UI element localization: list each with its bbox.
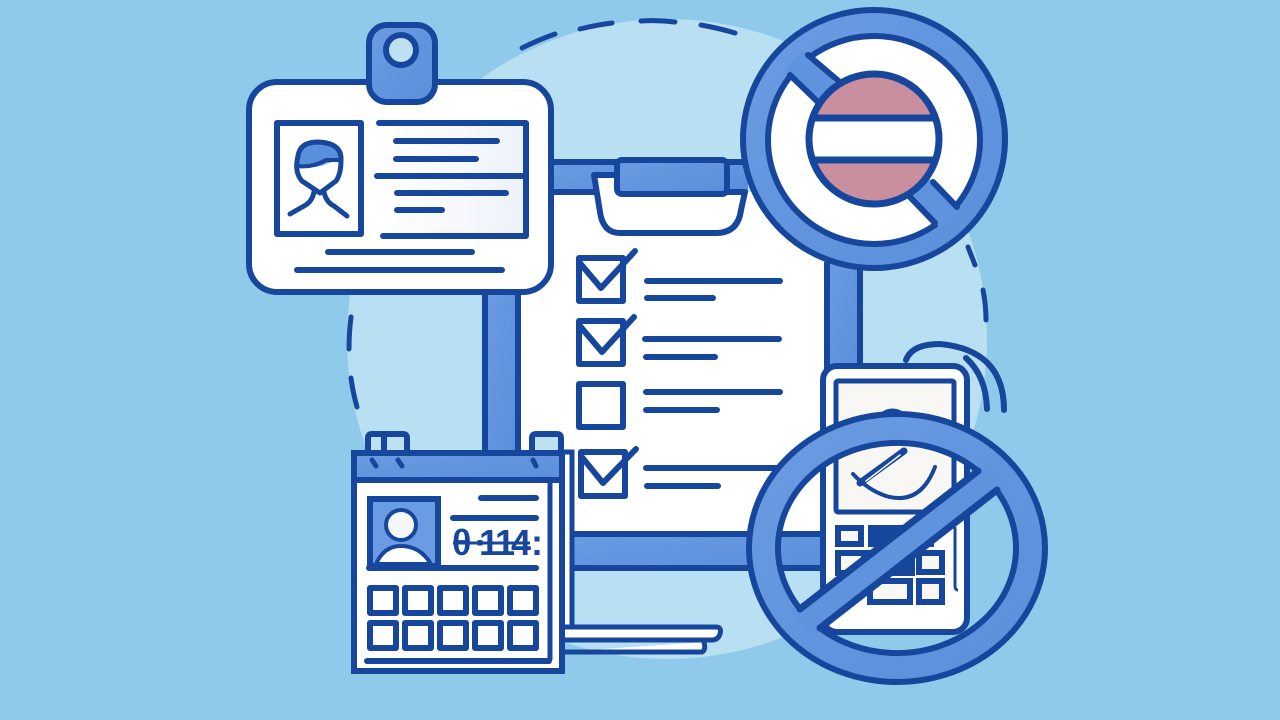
card footer lines [297,252,502,270]
back pages [556,452,720,652]
calendar [354,434,720,671]
screen bump [878,408,908,415]
screen icon [853,451,935,498]
checklist [579,251,780,496]
checklist row 1 [579,251,780,301]
portrait [277,123,361,234]
header band [354,453,562,480]
sign ring [749,414,1045,682]
checklist row 2 [579,317,779,364]
portrait [370,499,438,566]
top frame bar [553,162,748,192]
clipboard board [485,160,860,568]
clipboard clip tray [594,175,745,233]
date grid [370,588,536,648]
ID card [249,25,551,292]
calendar heading lines [453,498,536,518]
phone [823,344,1004,632]
keypad [838,528,942,602]
detail panel [377,123,526,236]
light circle backdrop [347,19,987,659]
page footer line [367,658,549,664]
striped pill [800,70,950,208]
clipboard paper [518,192,828,532]
sign centre [768,36,980,244]
phone body [823,366,967,632]
dashed orbit arcs [349,21,986,407]
left frame bar [485,290,518,455]
card body [249,82,551,292]
sign ring [743,10,1005,268]
lanyard clip [369,25,435,102]
checklist row 3 [579,384,780,427]
phone side line [955,527,958,590]
sign bar [785,50,962,228]
divider [369,565,536,571]
page inner edge [548,480,552,660]
date text: θ·114: [452,522,543,563]
checklist row 4 [581,449,780,496]
prohibition sign: pill [743,10,1005,268]
right frame bar [827,262,860,370]
signal waves [906,344,1004,410]
page [354,453,562,671]
binder rings [368,434,561,462]
prohibition sign: phone [749,414,1045,682]
bottom frame bar [572,534,827,568]
clipboard clip [617,160,727,194]
ring hooks [372,460,536,466]
sign bar [792,462,1005,636]
phone screen [836,381,954,512]
